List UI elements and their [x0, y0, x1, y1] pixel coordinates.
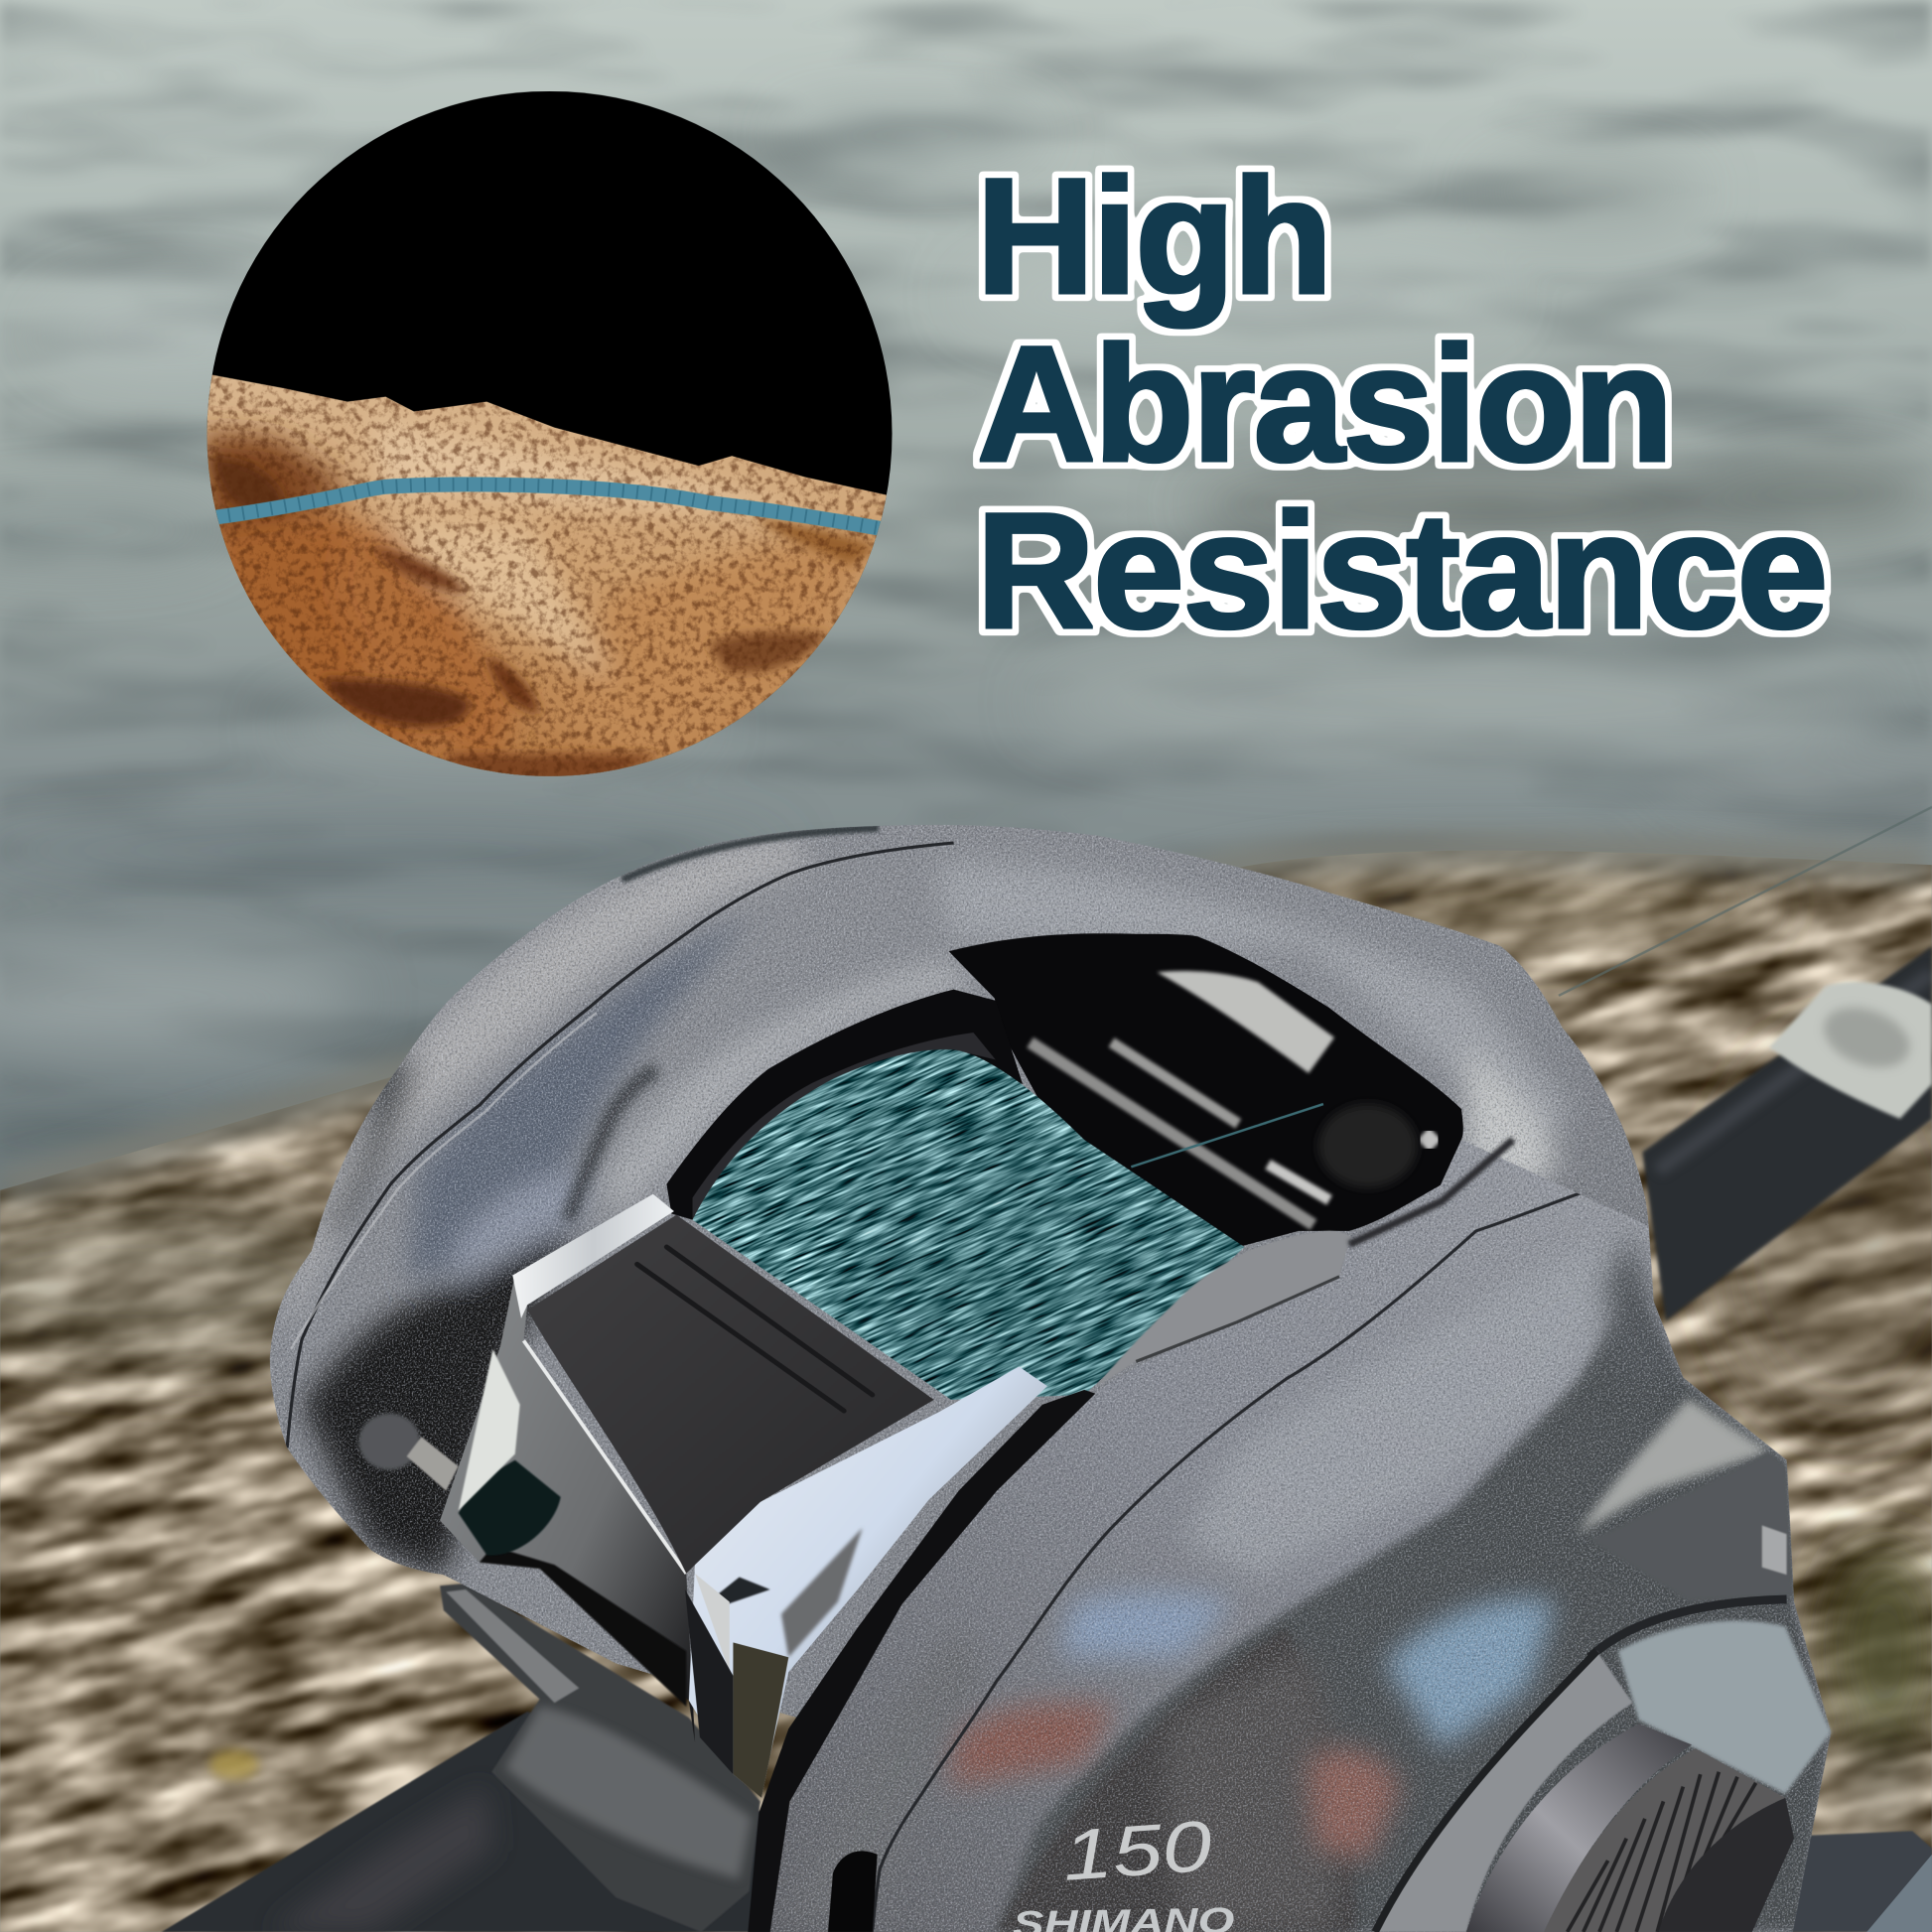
inset circle: line on rock [198, 91, 911, 788]
pin [358, 1414, 459, 1491]
stone ground [0, 825, 1932, 1932]
palming shoulder [1095, 1140, 1513, 1387]
line guide window [949, 933, 1463, 1246]
title [976, 145, 1827, 663]
blurred water [0, 0, 1932, 1294]
silver drag housing [1373, 1599, 1831, 1932]
rod blank and fishing line [1559, 807, 1932, 1320]
model badge on tail [1762, 1525, 1787, 1575]
chrome thumb bar right end [685, 1366, 1047, 1798]
reel foot bracket [440, 1584, 760, 1932]
rubber gasket [748, 1390, 1095, 1932]
star drag knob [1466, 1724, 1794, 1932]
reel left side plate [270, 824, 1682, 1725]
lower grips [162, 1712, 1932, 1932]
black thumb bar [527, 1215, 934, 1574]
braided line on spool [693, 1048, 1245, 1400]
rock with braided line [198, 369, 911, 788]
chrome thumb bar left end [440, 1194, 695, 1742]
reel model number: 150 [1060, 1807, 1214, 1896]
title line: Abrasion: Abrasion [977, 313, 1671, 496]
title line: High: High [976, 145, 1330, 329]
title line: Resistance: Resistance [976, 480, 1827, 663]
black circle backing [207, 91, 893, 776]
spool flange [666, 990, 1023, 1220]
right side plate [740, 1140, 1849, 1932]
